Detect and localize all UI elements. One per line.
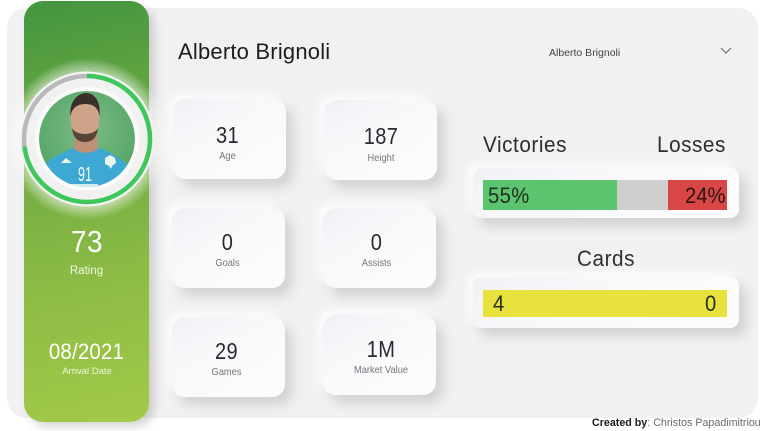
dropdown label: Alberto Brignoli [549,47,620,59]
card: assists [323,208,436,288]
age label: Age [219,151,236,162]
market value figure: 1M [367,336,395,362]
goals value: 0 [222,229,233,255]
card: age [173,99,286,179]
bar: cards [483,290,727,317]
age value: 31 [216,122,239,148]
player portrait with rating ring [22,59,158,219]
heading: victories: Victories [483,132,567,157]
bar segment: victories [483,180,617,210]
market value label: Market Value [354,365,408,376]
bar segment: losses [668,180,727,210]
icon: dropdown chevron [720,48,732,54]
yellow cards count: 4 [493,291,504,316]
bar segment: neutral [617,180,668,210]
player photo [39,91,135,192]
heading: cards: Cards [577,246,635,271]
panel: victories and losses bar [473,168,739,218]
panel: player sidebar [24,1,149,422]
card: height [324,100,437,180]
ring value [24,76,150,202]
goals label: Goals [215,258,240,269]
card: goals [172,208,285,288]
card: market value [323,315,436,395]
victories percent: 55% [488,183,530,208]
losses percent: 24% [685,183,726,208]
card: games [172,317,285,397]
height value: 187 [364,123,398,149]
rating label: Rating [70,265,103,277]
height label: Height [368,153,394,164]
credit line: Created by: Christos Papadimitriou [592,417,761,429]
arrival date label: Arrival Date [62,366,112,377]
heading: player name: Alberto Brignoli [178,39,330,64]
games value: 29 [215,338,238,364]
panel: cards bar [473,277,739,328]
assists label: Assists [362,258,391,269]
arrival date value: 08/2021 [49,339,124,364]
assists value: 0 [371,229,382,255]
heading: losses: Losses [657,132,726,157]
ring track [24,76,150,202]
player photo: 91 [78,164,92,186]
red cards count: 0 [705,291,716,316]
rating value: 73 [71,224,103,259]
games label: Games [212,367,241,378]
